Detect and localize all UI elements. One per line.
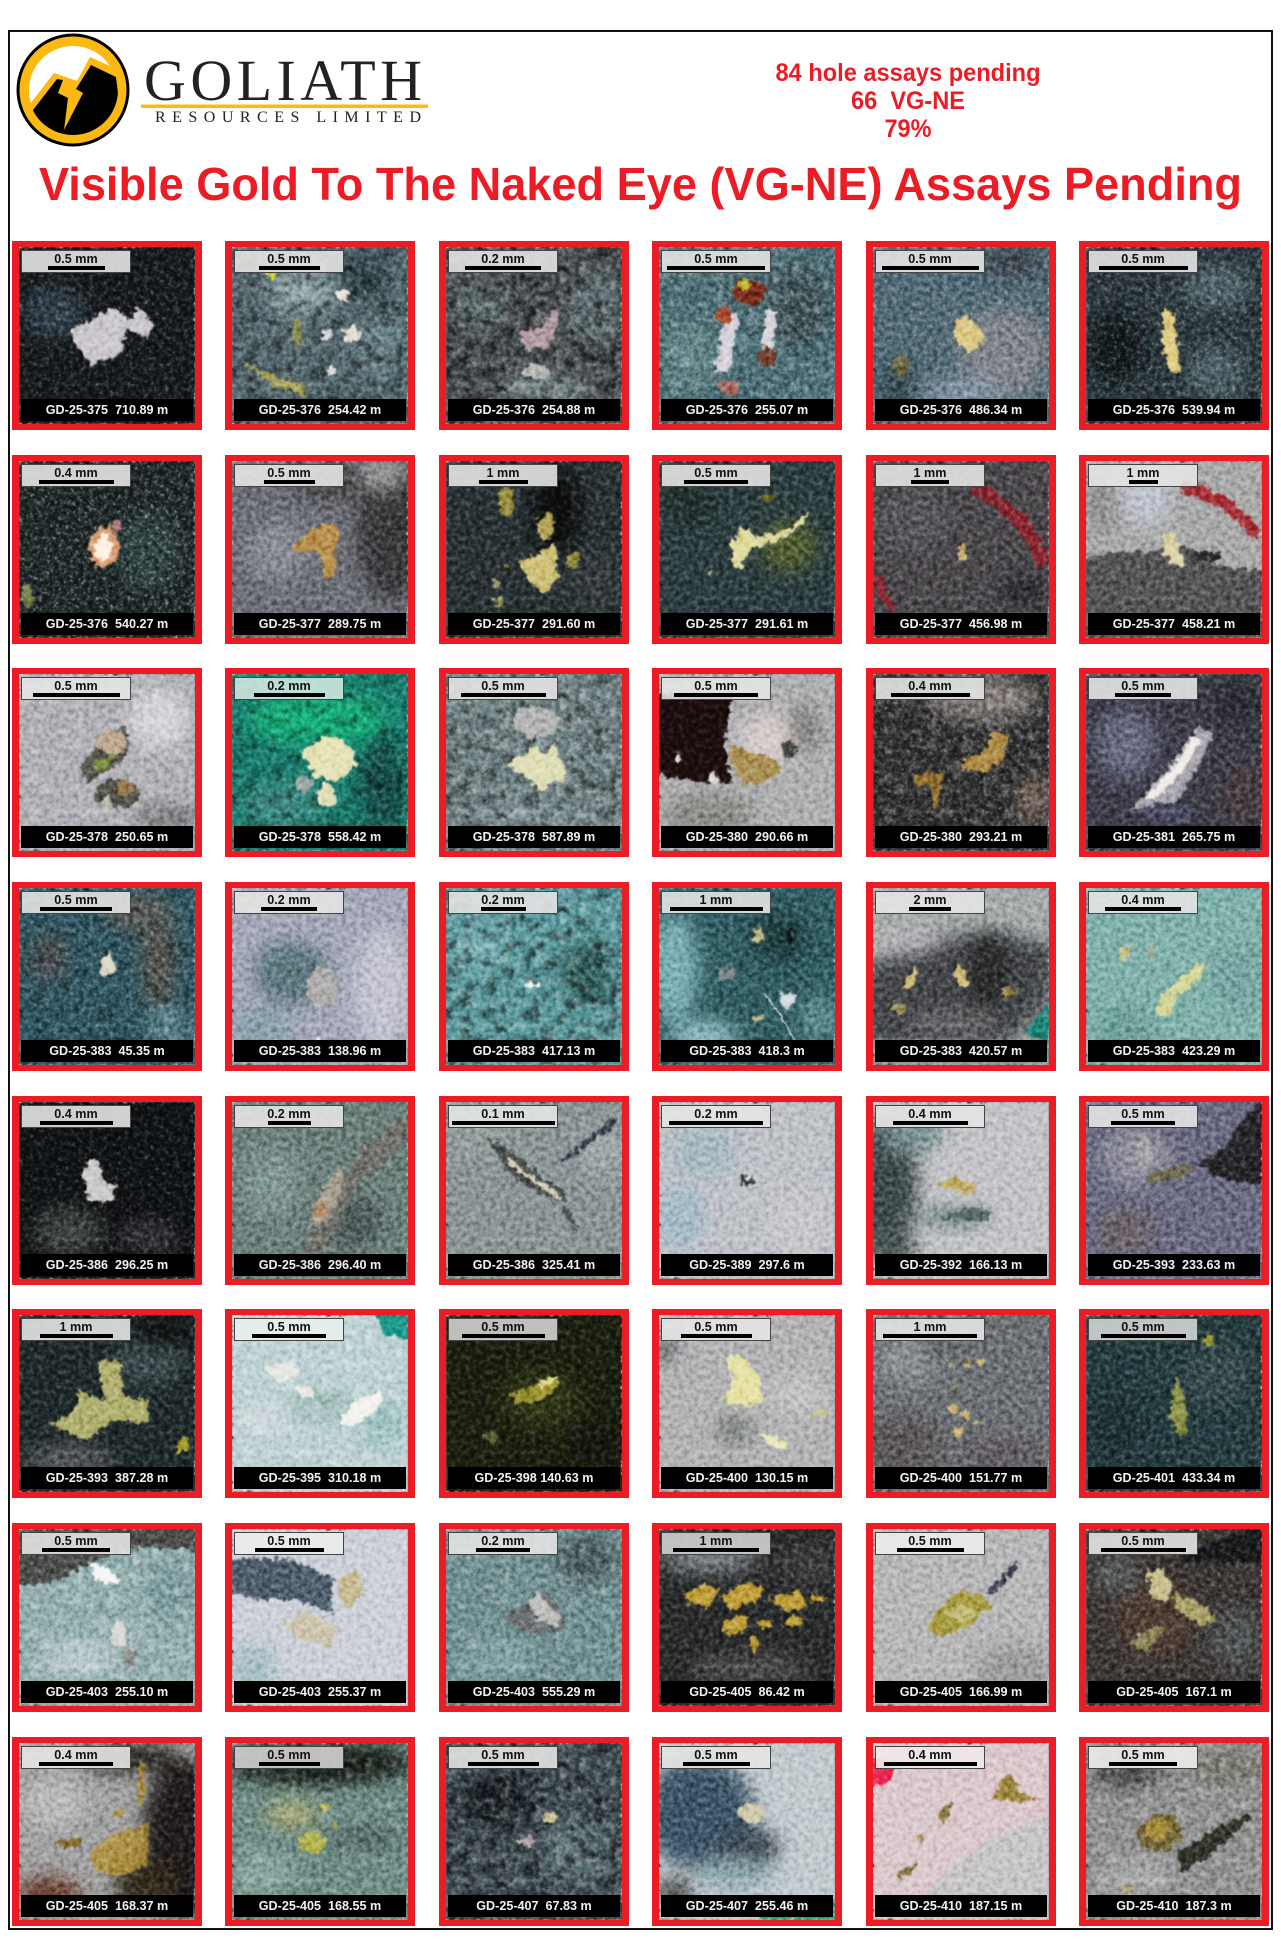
scale bar: 0.4 mm — [908, 679, 952, 693]
caption: GD-25-376 254.42 m — [259, 403, 381, 417]
caption — [661, 399, 833, 421]
caption — [875, 613, 1047, 635]
scale bar — [448, 891, 558, 914]
photo — [232, 1529, 408, 1706]
photo — [659, 1102, 835, 1279]
scale bar: 0.5 mm — [267, 252, 311, 266]
scale bar — [21, 677, 131, 700]
photo — [232, 461, 408, 638]
caption: GD-25-407 67.83 m — [476, 1899, 592, 1913]
caption — [448, 1254, 620, 1276]
caption: GD-25-378 250.65 m — [46, 830, 168, 844]
caption — [1088, 613, 1260, 635]
caption: GD-25-392 166.13 m — [900, 1258, 1022, 1272]
caption — [1088, 399, 1260, 421]
panel: GD-25-377 291.61 m — [652, 455, 842, 644]
photo — [1086, 1529, 1262, 1706]
caption: GD-25-383 423.29 m — [1113, 1044, 1235, 1058]
scale bar: 0.4 mm — [54, 466, 98, 480]
scale bar: 1 mm — [914, 1320, 946, 1334]
panel: GD-25-380 293.21 m — [866, 668, 1056, 857]
scale bar: 0.5 mm — [908, 1534, 952, 1548]
scale bar: 0.5 mm — [694, 252, 738, 266]
photo — [1086, 674, 1262, 851]
scale bar — [234, 891, 344, 914]
photo — [1086, 247, 1262, 424]
scale bar: 1 mm — [1127, 466, 1159, 480]
scale bar — [448, 250, 558, 273]
scale bar: 0.4 mm — [908, 1107, 952, 1121]
photo — [873, 1743, 1049, 1920]
caption — [661, 1254, 833, 1276]
caption — [875, 1895, 1047, 1917]
caption: GD-25-410 187.3 m — [1116, 1899, 1232, 1913]
company name: RESOURCES LIMITED — [155, 109, 421, 126]
caption: GD-25-376 254.88 m — [473, 403, 595, 417]
photo — [1086, 1315, 1262, 1492]
photo — [19, 1102, 195, 1279]
panel: GD-25-376 254.42 m — [225, 241, 414, 430]
caption — [21, 1040, 193, 1062]
scale bar: 0.5 mm — [54, 1534, 98, 1548]
scale bar — [1088, 464, 1198, 487]
photo — [873, 888, 1049, 1065]
photo — [659, 247, 835, 424]
caption: GD-25-405 86.42 m — [689, 1685, 805, 1699]
photo — [446, 888, 622, 1065]
scale bar — [448, 1746, 558, 1769]
caption: GD-25-383 420.57 m — [900, 1044, 1022, 1058]
scale bar — [875, 1318, 985, 1341]
scale bar: 1 mm — [700, 893, 732, 907]
panel: GD-25-386 325.41 m — [439, 1096, 628, 1285]
panel: GD-25-405 86.42 m — [652, 1523, 842, 1712]
scale bar — [1088, 677, 1198, 700]
caption: GD-25-377 456.98 m — [900, 617, 1022, 631]
panel: GD-25-403 255.10 m — [12, 1523, 202, 1712]
caption: GD-25-393 233.63 m — [1113, 1258, 1235, 1272]
scale bar: 0.5 mm — [1121, 1107, 1165, 1121]
scale bar — [661, 677, 771, 700]
scale bar — [661, 1105, 771, 1128]
caption — [234, 1895, 406, 1917]
caption — [448, 1895, 620, 1917]
scale bar: 0.4 mm — [54, 1748, 98, 1762]
caption — [234, 399, 406, 421]
caption — [875, 1681, 1047, 1703]
scale bar: 0.5 mm — [481, 1320, 525, 1334]
caption — [875, 1467, 1047, 1489]
caption — [21, 613, 193, 635]
caption — [21, 399, 193, 421]
panel: GD-25-403 555.29 m — [439, 1523, 628, 1712]
photo — [873, 461, 1049, 638]
panel: GD-25-405 167.1 m — [1079, 1523, 1268, 1712]
photo — [1086, 461, 1262, 638]
scale bar: 0.5 mm — [1121, 679, 1165, 693]
caption — [661, 826, 833, 848]
photo — [659, 461, 835, 638]
assay statistics: 79% — [884, 115, 932, 143]
scale bar — [234, 1105, 344, 1128]
panel: GD-25-383 423.29 m — [1079, 882, 1268, 1071]
panel: GD-25-377 289.75 m — [225, 455, 414, 644]
photo — [232, 888, 408, 1065]
caption — [448, 1040, 620, 1062]
panel: GD-25-410 187.3 m — [1079, 1737, 1268, 1926]
caption: GD-25-383 417.13 m — [473, 1044, 595, 1058]
panel: GD-25-403 255.37 m — [225, 1523, 414, 1712]
scale bar: 0.5 mm — [267, 1320, 311, 1334]
panel: GD-25-383 138.96 m — [225, 882, 414, 1071]
panel: GD-25-376 254.88 m — [439, 241, 628, 430]
caption: GD-25-398 140.63 m — [474, 1471, 594, 1485]
caption: GD-25-403 255.37 m — [259, 1685, 381, 1699]
panel: GD-25-377 458.21 m — [1079, 455, 1268, 644]
scale bar — [875, 1105, 985, 1128]
icon: Goliath logo — [16, 34, 130, 150]
caption: GD-25-378 587.89 m — [473, 830, 595, 844]
caption — [448, 1467, 620, 1489]
caption — [21, 1467, 193, 1489]
caption: GD-25-377 291.60 m — [473, 617, 595, 631]
scale bar: 0.2 mm — [267, 1107, 311, 1121]
caption: GD-25-405 168.37 m — [46, 1899, 168, 1913]
scale bar: 0.5 mm — [481, 1748, 525, 1762]
scale bar — [661, 1532, 771, 1555]
caption: GD-25-377 291.61 m — [686, 617, 808, 631]
photo — [446, 1102, 622, 1279]
panel: GD-25-376 539.94 m — [1079, 241, 1268, 430]
caption — [661, 1895, 833, 1917]
caption: GD-25-376 540.27 m — [46, 617, 168, 631]
caption: GD-25-405 167.1 m — [1116, 1685, 1232, 1699]
photo — [659, 1315, 835, 1492]
panel: GD-25-392 166.13 m — [866, 1096, 1056, 1285]
caption — [875, 1254, 1047, 1276]
caption: GD-25-380 293.21 m — [900, 830, 1022, 844]
photo — [19, 247, 195, 424]
panel: GD-25-383 417.13 m — [439, 882, 628, 1071]
photo — [446, 1743, 622, 1920]
scale bar — [234, 464, 344, 487]
caption — [234, 1254, 406, 1276]
caption — [875, 1040, 1047, 1062]
panel: GD-25-386 296.25 m — [12, 1096, 202, 1285]
scale bar: 0.5 mm — [1121, 252, 1165, 266]
caption: GD-25-386 296.40 m — [259, 1258, 381, 1272]
panel: GD-25-383 420.57 m — [866, 882, 1056, 1071]
photo — [19, 1315, 195, 1492]
photo — [446, 1315, 622, 1492]
caption: GD-25-386 325.41 m — [473, 1258, 595, 1272]
caption: GD-25-403 255.10 m — [46, 1685, 168, 1699]
panel: GD-25-400 151.77 m — [866, 1309, 1056, 1498]
scale bar — [1088, 1105, 1198, 1128]
scale bar — [661, 1746, 771, 1769]
panel: GD-25-377 291.60 m — [439, 455, 628, 644]
scale bar: 0.5 mm — [694, 1320, 738, 1334]
panel: GD-25-398 140.63 m — [439, 1309, 628, 1498]
caption — [875, 826, 1047, 848]
photo — [873, 674, 1049, 851]
caption — [1088, 1040, 1260, 1062]
panel: GD-25-381 265.75 m — [1079, 668, 1268, 857]
panel: GD-25-376 255.07 m — [652, 241, 842, 430]
scale bar — [875, 891, 985, 914]
caption: GD-25-383 418.3 m — [689, 1044, 805, 1058]
caption — [234, 1467, 406, 1489]
scale bar — [448, 464, 558, 487]
panel: GD-25-393 233.63 m — [1079, 1096, 1268, 1285]
caption: GD-25-403 555.29 m — [473, 1685, 595, 1699]
scale bar: 0.2 mm — [481, 252, 525, 266]
caption — [21, 1681, 193, 1703]
scale bar — [661, 891, 771, 914]
photo — [446, 461, 622, 638]
caption: GD-25-405 168.55 m — [259, 1899, 381, 1913]
scale bar — [661, 464, 771, 487]
panel: GD-25-405 168.37 m — [12, 1737, 202, 1926]
panel: GD-25-401 433.34 m — [1079, 1309, 1268, 1498]
caption: GD-25-410 187.15 m — [900, 1899, 1022, 1913]
scale bar: 0.5 mm — [54, 252, 98, 266]
assay statistics — [776, 59, 1040, 143]
caption — [448, 1681, 620, 1703]
scale bar — [234, 250, 344, 273]
panel: GD-25-376 486.34 m — [866, 241, 1056, 430]
scale bar — [234, 1318, 344, 1341]
title: Visible Gold To The Naked Eye (VG-NE) Assays Pending — [39, 158, 1242, 210]
scale bar — [1088, 250, 1198, 273]
photo — [659, 1743, 835, 1920]
caption — [661, 1681, 833, 1703]
scale bar: 0.5 mm — [1121, 1320, 1165, 1334]
photo — [19, 461, 195, 638]
caption — [448, 826, 620, 848]
photo — [873, 247, 1049, 424]
scale bar: 1 mm — [914, 466, 946, 480]
caption — [448, 399, 620, 421]
caption: GD-25-376 255.07 m — [686, 403, 808, 417]
caption — [661, 1467, 833, 1489]
scale bar: 0.5 mm — [267, 1534, 311, 1548]
scale bar: 0.2 mm — [267, 679, 311, 693]
caption — [1088, 1895, 1260, 1917]
caption — [21, 1895, 193, 1917]
caption — [21, 826, 193, 848]
scale bar — [875, 677, 985, 700]
caption: GD-25-383 45.35 m — [49, 1044, 165, 1058]
photo — [232, 1315, 408, 1492]
scale bar — [234, 1746, 344, 1769]
photo — [446, 1529, 622, 1706]
scale bar: 0.5 mm — [54, 893, 98, 907]
photo — [659, 674, 835, 851]
panel: GD-25-386 296.40 m — [225, 1096, 414, 1285]
panel: GD-25-378 558.42 m — [225, 668, 414, 857]
photo — [873, 1315, 1049, 1492]
caption: GD-25-400 130.15 m — [686, 1471, 808, 1485]
scale bar — [1088, 1532, 1198, 1555]
panel: GD-25-378 250.65 m — [12, 668, 202, 857]
caption — [234, 826, 406, 848]
scale bar — [448, 1318, 558, 1341]
panel: GD-25-393 387.28 m — [12, 1309, 202, 1498]
company name: GOLIATH — [144, 48, 422, 113]
caption: GD-25-389 297.6 m — [689, 1258, 805, 1272]
scale bar — [661, 1318, 771, 1341]
caption: GD-25-383 138.96 m — [259, 1044, 381, 1058]
scale bar — [661, 250, 771, 273]
photo — [232, 1743, 408, 1920]
panel: GD-25-378 587.89 m — [439, 668, 628, 857]
scale bar: 0.5 mm — [1121, 1534, 1165, 1548]
caption: GD-25-380 290.66 m — [686, 830, 808, 844]
caption: GD-25-393 387.28 m — [46, 1471, 168, 1485]
caption — [1088, 1254, 1260, 1276]
caption: GD-25-376 539.94 m — [1113, 403, 1235, 417]
scale bar — [875, 1532, 985, 1555]
photo — [1086, 1102, 1262, 1279]
caption: GD-25-377 289.75 m — [259, 617, 381, 631]
photo — [1086, 888, 1262, 1065]
caption — [21, 1254, 193, 1276]
photo — [232, 1102, 408, 1279]
scale bar: 1 mm — [60, 1320, 92, 1334]
scale bar: 0.5 mm — [908, 252, 952, 266]
panel: GD-25-407 255.46 m — [652, 1737, 842, 1926]
panel: GD-25-395 310.18 m — [225, 1309, 414, 1498]
photo — [19, 1529, 195, 1706]
scale bar — [448, 1532, 558, 1555]
photo — [1086, 1743, 1262, 1920]
caption: GD-25-401 433.34 m — [1113, 1471, 1235, 1485]
caption — [234, 1040, 406, 1062]
caption: GD-25-376 486.34 m — [900, 403, 1022, 417]
scale bar: 0.5 mm — [54, 679, 98, 693]
scale bar: 0.5 mm — [267, 1748, 311, 1762]
caption — [661, 613, 833, 635]
photo — [232, 247, 408, 424]
caption — [1088, 1681, 1260, 1703]
scale bar — [875, 1746, 985, 1769]
photo — [659, 1529, 835, 1706]
caption: GD-25-386 296.25 m — [46, 1258, 168, 1272]
scale bar — [1088, 1746, 1198, 1769]
scale bar — [21, 1746, 131, 1769]
panel: GD-25-383 418.3 m — [652, 882, 842, 1071]
panel: GD-25-377 456.98 m — [866, 455, 1056, 644]
scale bar — [1088, 891, 1198, 914]
photo — [19, 674, 195, 851]
caption — [234, 1681, 406, 1703]
scale bar — [21, 1532, 131, 1555]
scale bar — [21, 1318, 131, 1341]
scale bar: 0.2 mm — [481, 1534, 525, 1548]
scale bar: 2 mm — [914, 893, 946, 907]
scale bar: 0.4 mm — [1121, 893, 1165, 907]
caption: GD-25-377 458.21 m — [1113, 617, 1235, 631]
scale bar — [21, 891, 131, 914]
scale bar — [234, 677, 344, 700]
caption: GD-25-400 151.77 m — [900, 1471, 1022, 1485]
scale bar — [875, 250, 985, 273]
panel: GD-25-410 187.15 m — [866, 1737, 1056, 1926]
assay statistics: 84 hole assays pending — [776, 59, 1040, 87]
caption: GD-25-395 310.18 m — [259, 1471, 381, 1485]
scale bar: 1 mm — [487, 466, 519, 480]
scale bar: 0.4 mm — [54, 1107, 98, 1121]
caption — [448, 613, 620, 635]
caption: GD-25-405 166.99 m — [900, 1685, 1022, 1699]
panel: GD-25-405 166.99 m — [866, 1523, 1056, 1712]
panel: GD-25-407 67.83 m — [439, 1737, 628, 1926]
panel: GD-25-376 540.27 m — [12, 455, 202, 644]
scale bar: 0.2 mm — [481, 893, 525, 907]
photo — [659, 888, 835, 1065]
scale bar: 0.5 mm — [694, 1748, 738, 1762]
scale bar: 1 mm — [700, 1534, 732, 1548]
photo — [19, 888, 195, 1065]
photo — [873, 1529, 1049, 1706]
scale bar: 0.5 mm — [694, 679, 738, 693]
scale bar: 0.2 mm — [267, 893, 311, 907]
caption — [1088, 826, 1260, 848]
photo — [19, 1743, 195, 1920]
scale bar — [448, 1105, 558, 1128]
photo — [232, 674, 408, 851]
scale bar: 0.5 mm — [694, 466, 738, 480]
panel: GD-25-380 290.66 m — [652, 668, 842, 857]
caption: GD-25-381 265.75 m — [1113, 830, 1235, 844]
scale bar — [21, 1105, 131, 1128]
caption — [875, 399, 1047, 421]
scale bar: 0.4 mm — [908, 1748, 952, 1762]
scale bar — [21, 464, 131, 487]
caption — [234, 613, 406, 635]
scale bar: 0.2 mm — [694, 1107, 738, 1121]
panel: GD-25-400 130.15 m — [652, 1309, 842, 1498]
scale bar: 0.5 mm — [1121, 1748, 1165, 1762]
photo — [873, 1102, 1049, 1279]
panel: GD-25-405 168.55 m — [225, 1737, 414, 1926]
caption: GD-25-378 558.42 m — [259, 830, 381, 844]
scale bar — [1088, 1318, 1198, 1341]
photo — [446, 674, 622, 851]
panel: GD-25-389 297.6 m — [652, 1096, 842, 1285]
scale bar: 0.5 mm — [481, 679, 525, 693]
panel: GD-25-375 710.89 m — [12, 241, 202, 430]
photo — [446, 247, 622, 424]
scale bar — [875, 464, 985, 487]
caption — [1088, 1467, 1260, 1489]
scale bar — [234, 1532, 344, 1555]
header — [16, 34, 1242, 210]
caption: GD-25-375 710.89 m — [46, 403, 168, 417]
caption — [661, 1040, 833, 1062]
assay statistics: 66 VG-NE — [851, 87, 965, 115]
scale bar: 0.1 mm — [481, 1107, 525, 1121]
caption: GD-25-407 255.46 m — [686, 1899, 808, 1913]
scale bar — [448, 677, 558, 700]
panel: GD-25-383 45.35 m — [12, 882, 202, 1071]
scale bar — [21, 250, 131, 273]
scale bar: 0.5 mm — [267, 466, 311, 480]
